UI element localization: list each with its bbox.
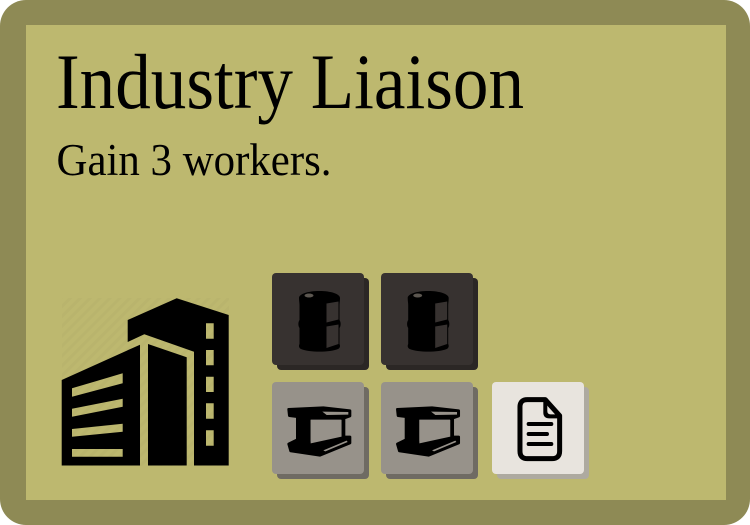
icon: building <box>62 298 229 466</box>
resource tile: steel beam 1 <box>272 382 369 479</box>
resource tile: oil barrel 2 <box>381 273 478 370</box>
icon: barrel <box>407 291 449 352</box>
title: Industry Liaison <box>56 38 524 125</box>
icon: steel beam <box>289 408 350 455</box>
resource tile: oil barrel 1 <box>272 273 369 370</box>
resource tile: document <box>492 382 589 479</box>
icon: steel beam <box>397 408 459 455</box>
icon: barrel <box>298 291 341 352</box>
icon: document <box>520 398 561 459</box>
resource tile: steel beam 2 <box>381 382 478 479</box>
effect text: Gain 3 workers. <box>56 135 332 185</box>
